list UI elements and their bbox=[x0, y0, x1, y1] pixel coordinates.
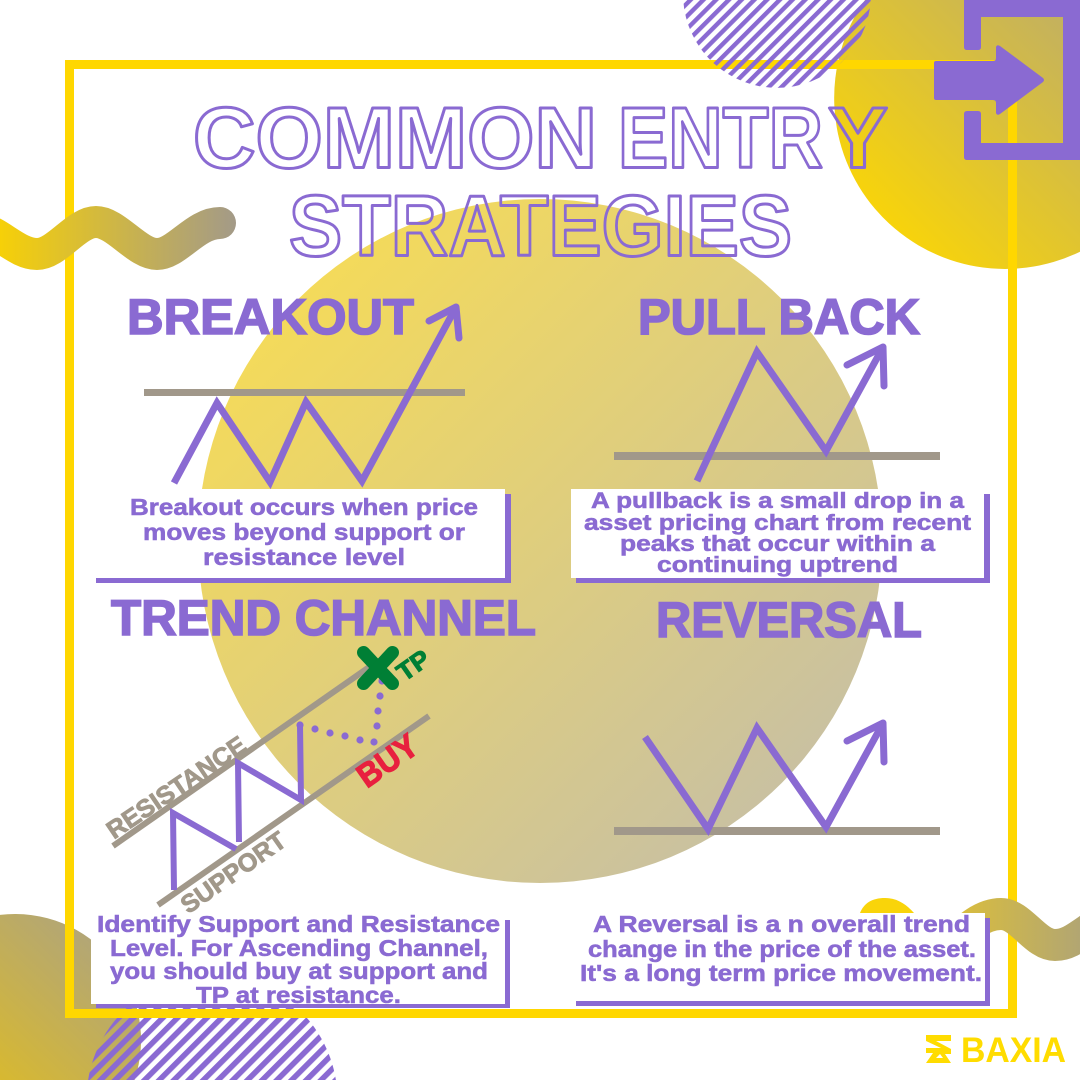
heading: reversal: REVERSAL bbox=[656, 592, 922, 648]
chart: pull back bbox=[614, 347, 940, 481]
panel: reversal bbox=[571, 592, 990, 1006]
decorative yellow bump bbox=[860, 898, 914, 913]
text box: reversal: A Reversal is a n overall trend bbox=[593, 911, 970, 937]
label: support: SUPPORT bbox=[176, 826, 292, 919]
text box: pull back: A pullback is a small drop in a bbox=[591, 488, 965, 513]
title: Y bbox=[828, 90, 888, 186]
heading: breakout: BREAKOUT bbox=[127, 289, 414, 345]
title: STRATEGIES bbox=[289, 178, 792, 274]
text box: trend channel: Identify Support and Resistance bbox=[97, 911, 500, 937]
text box: reversal: It's a long term price movement. bbox=[580, 960, 982, 986]
yellow frame bbox=[70, 64, 1012, 1014]
panel: pull back bbox=[571, 289, 990, 583]
title bbox=[193, 90, 888, 274]
label: TP: TP bbox=[392, 645, 436, 687]
text box: trend channel bbox=[91, 911, 510, 1008]
text box: pull back: continuing uptrend bbox=[657, 552, 898, 577]
heading: pull back: PULL BACK bbox=[638, 289, 920, 345]
panel: breakout bbox=[96, 289, 511, 583]
text box: breakout bbox=[96, 489, 511, 583]
logo: Baxia bbox=[926, 1031, 1066, 1070]
chart: breakout bbox=[144, 307, 465, 483]
title: COMMON bbox=[193, 90, 597, 186]
dotted price path bbox=[296, 677, 386, 746]
decorative striped circle: top bbox=[683, 0, 871, 88]
label: resistance: RESISTANCE bbox=[102, 731, 252, 845]
decorative wave: left bbox=[0, 222, 220, 254]
central gradient circle bbox=[198, 199, 882, 883]
text box: trend channel: you should buy at support and bbox=[110, 958, 488, 984]
icon: take profit cross bbox=[364, 652, 392, 684]
text box: breakout: moves beyond support or bbox=[143, 519, 465, 545]
text box: breakout: resistance level bbox=[203, 544, 405, 570]
decorative circle: top right bbox=[834, 0, 1080, 269]
chart: reversal bbox=[614, 723, 940, 835]
icon: entry arrow into bracket bbox=[934, 0, 1080, 160]
text box: reversal bbox=[571, 911, 990, 1006]
panel: trend channel bbox=[91, 590, 536, 1008]
text box: trend channel: TP at resistance. bbox=[196, 982, 401, 1008]
text box: breakout: Breakout occurs when price bbox=[130, 494, 478, 520]
heading: trend channel: TREND CHANNEL bbox=[111, 590, 536, 646]
decorative circle: bottom left bbox=[0, 914, 141, 1080]
text box: pull back: asset pricing chart from recent bbox=[584, 510, 972, 535]
title: ENTR bbox=[618, 90, 823, 186]
icon: logo mark bbox=[926, 1035, 951, 1063]
decorative striped circle: bottom bbox=[88, 1005, 336, 1080]
text box: pull back bbox=[571, 488, 990, 583]
decorative wave: bottom right bbox=[945, 914, 1080, 948]
text box: reversal: change in the price of the asset. bbox=[588, 936, 976, 962]
label: BUY: BUY bbox=[350, 726, 425, 794]
text box: pull back: peaks that occur within a bbox=[620, 531, 936, 556]
chart: trend channel bbox=[102, 645, 436, 919]
text box: trend channel: Level. For Ascending Channel, bbox=[110, 935, 488, 961]
wordmark: BAXIA bbox=[961, 1031, 1066, 1070]
